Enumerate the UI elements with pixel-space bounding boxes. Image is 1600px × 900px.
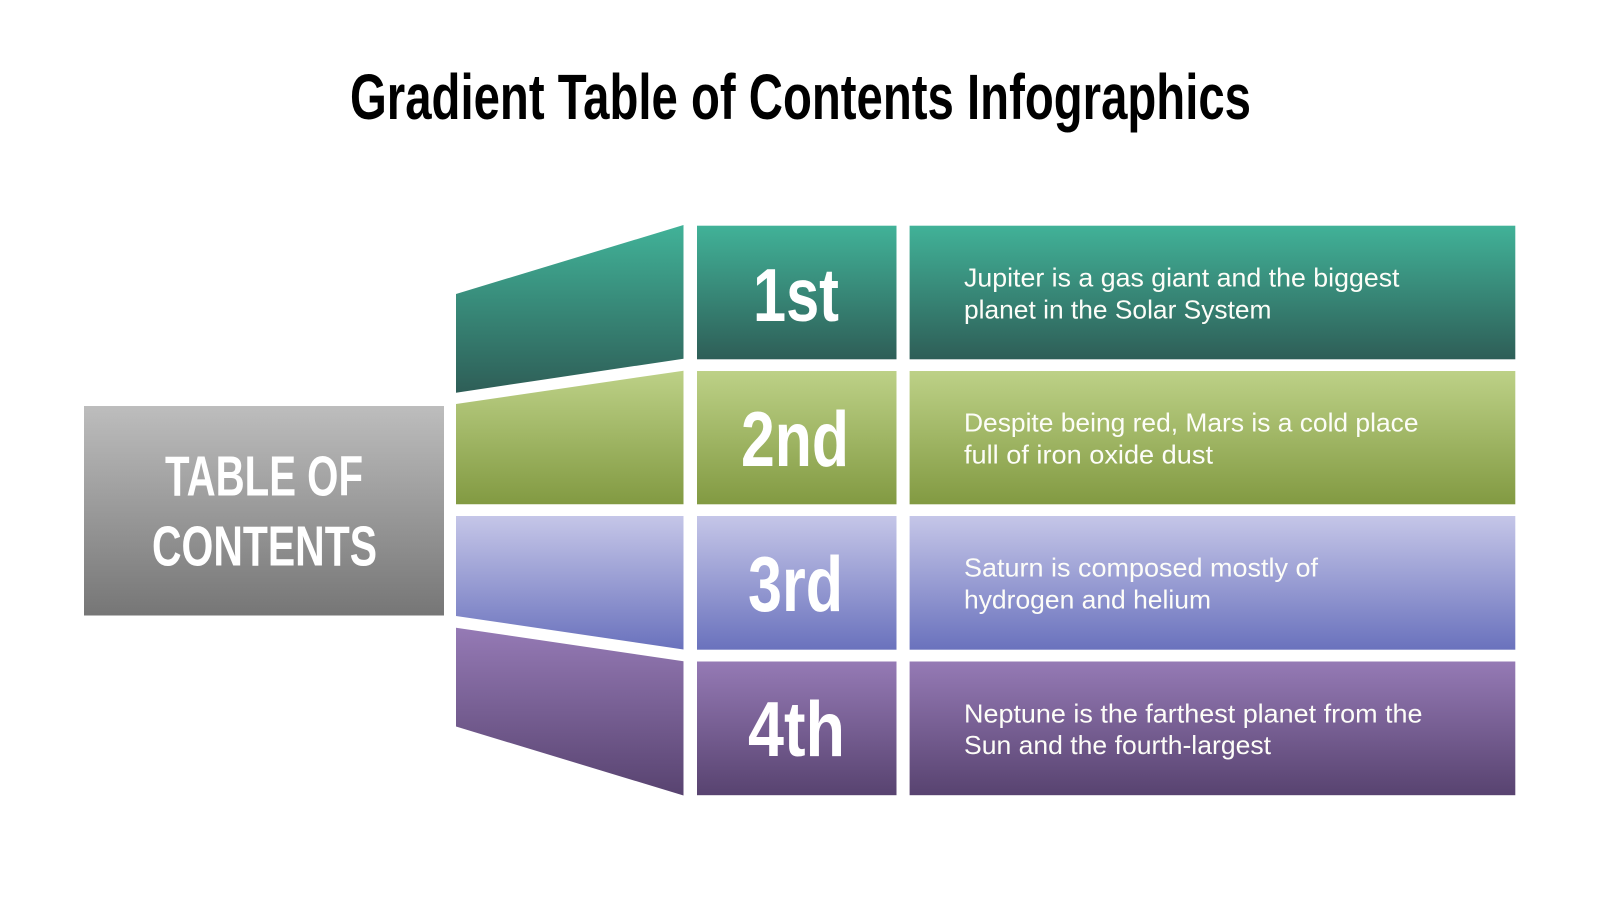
number 2nd: 2nd [741,395,849,483]
connector wedge 4 [456,628,684,796]
number cell 4 [697,662,896,795]
description cell 3 [910,516,1515,650]
description 2 [964,408,1418,469]
panel: row 2 [456,371,1515,504]
panel: row 1 [456,225,1515,393]
number cell 1 [697,226,896,359]
number 1st: 1st [753,253,839,337]
number 4th: 4th [748,685,845,773]
description 3: hydrogen and helium [964,584,1211,614]
description 2: Despite being red, Mars is a cold place [964,408,1418,438]
title: Gradient Table of Contents Infographics [350,61,1251,133]
description 4: Sun and the fourth-largest [964,730,1272,760]
description 2: full of iron oxide dust [964,439,1214,469]
panel: table of contents box [84,406,444,616]
description 3 [964,553,1319,614]
description 3: Saturn is composed mostly of [964,553,1319,583]
panel: row 3 [456,516,1515,650]
box heading line 1: TABLE OF [165,444,363,508]
description 1: planet in the Solar System [964,294,1272,324]
description 1 [964,263,1400,324]
number cell 3 [697,516,896,650]
description 1: Jupiter is a gas giant and the biggest [964,263,1400,293]
connector wedge 3 [456,516,684,650]
description cell 4 [910,662,1515,795]
box heading line 2: CONTENTS [152,514,377,578]
description cell 2 [910,371,1515,504]
description 4: Neptune is the farthest planet from the [964,698,1422,728]
connector wedge 1 [456,225,684,393]
number cell 2 [697,371,896,504]
connector wedge 2 [456,371,684,504]
number 3rd: 3rd [748,540,843,628]
description 4 [964,698,1422,760]
panel: row 4 [456,628,1515,796]
description cell 1 [910,226,1515,359]
